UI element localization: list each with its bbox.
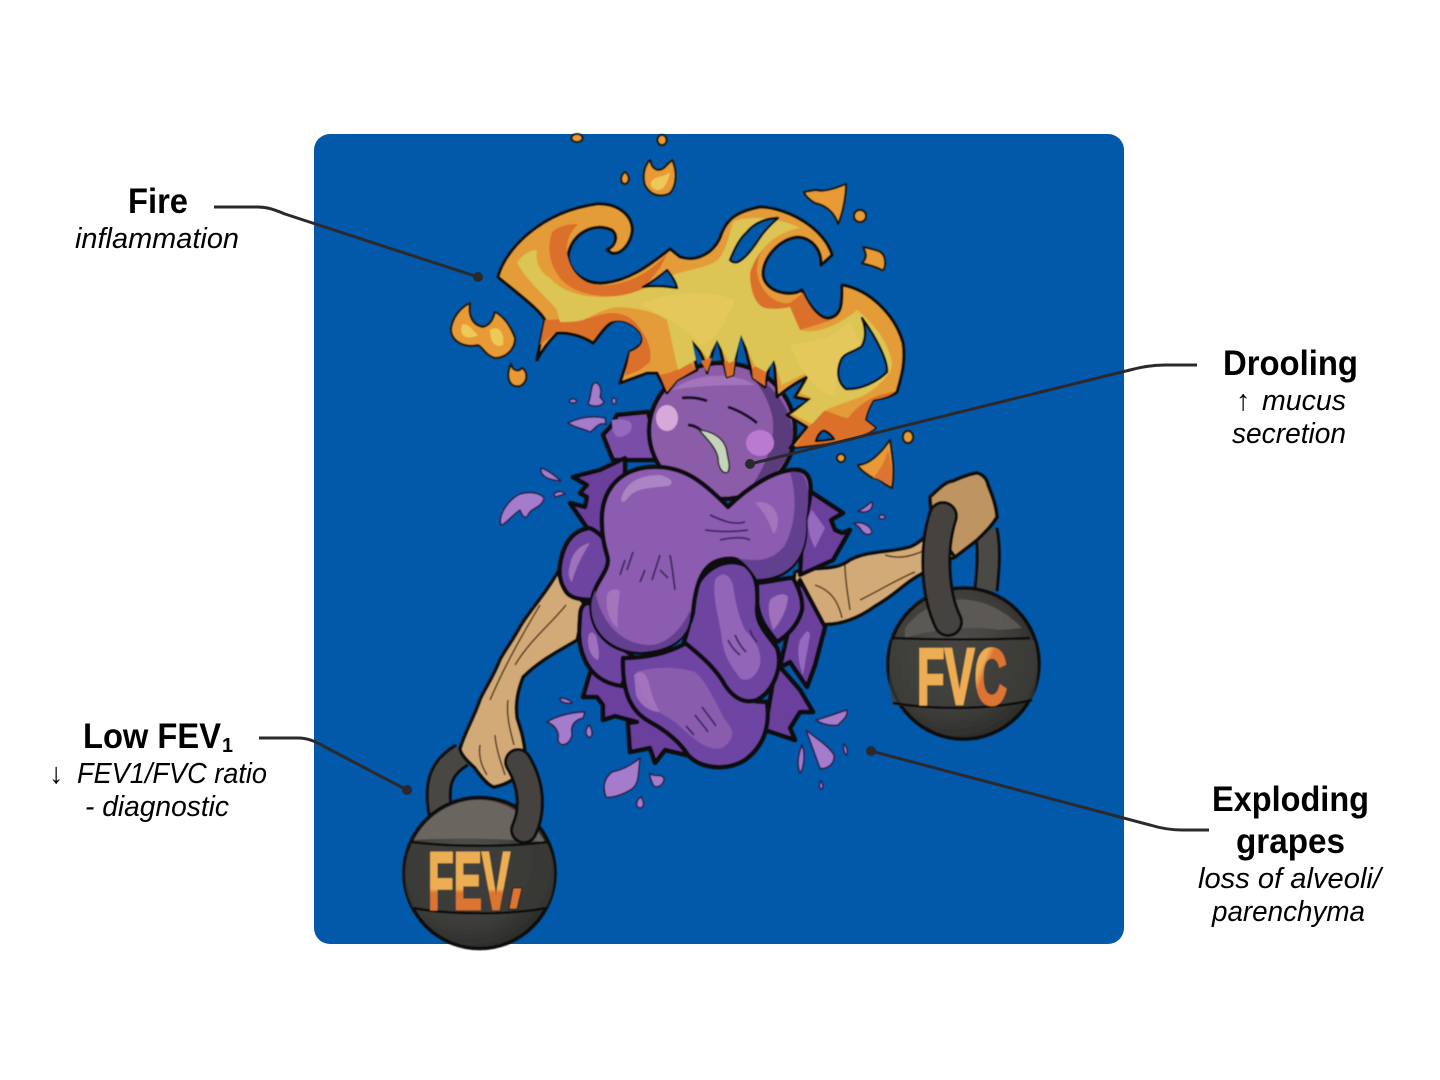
kettlebell: FVC [888, 473, 1039, 739]
grape head with face [649, 363, 795, 499]
flame openings [643, 218, 887, 441]
label: Drooling: Drooling [1223, 344, 1358, 383]
kettle label FVC: FVC [917, 632, 1007, 721]
kettle handle: FEV1 back [439, 755, 462, 816]
eye: right closed [728, 407, 757, 423]
flame core: yellow [517, 218, 892, 424]
label: Low FEV1: Low FEV [83, 717, 222, 756]
panel: blue illustration background [314, 134, 1124, 944]
drool [699, 430, 729, 473]
arm: left arm holding FEV1 kettlebell [460, 572, 585, 787]
label: Low FEV1: FEV1/FVC ratio [77, 758, 267, 790]
flames: main fire on head [498, 204, 904, 448]
label: Low FEV1 [49, 717, 267, 823]
label: Exploding grapes: grapes [1236, 822, 1345, 861]
label: Drooling: mucus [1262, 385, 1346, 417]
flame shading: red-orange bands [540, 224, 896, 447]
kettle handle: back [986, 530, 988, 590]
kettle label subscript [509, 888, 522, 909]
label: Exploding grapes: Exploding [1212, 780, 1369, 819]
label: Low FEV1: - diagnostic [85, 791, 229, 823]
grape wrinkles [620, 515, 750, 590]
arm: right arm holding FVC kettlebell [790, 526, 970, 624]
label: Fire: inflammation [75, 223, 239, 255]
eye: left closed [682, 398, 707, 401]
label: Drooling: secretion [1232, 418, 1346, 450]
label: Exploding grapes: parenchyma [1211, 896, 1365, 928]
label: Low FEV1: ↓ [49, 758, 64, 790]
label: Drooling: ↑ [1236, 385, 1250, 417]
grape: middle peanut [684, 562, 779, 701]
label: Low FEV1: 1 [222, 735, 233, 757]
leader line: Drooling [745, 365, 1197, 469]
right hand gripping handle [930, 473, 997, 557]
grape highlights [621, 475, 672, 502]
kettle handle: front [518, 762, 530, 830]
leader line: Fire [214, 207, 483, 282]
flame highlight [640, 293, 860, 395]
cheek: left blush [656, 405, 678, 431]
grape: left upper [560, 528, 612, 600]
grape: large top lobe joined to right [591, 467, 811, 653]
kettle label FEV1: FEV [428, 836, 510, 927]
kettlebell: FEV1 [404, 762, 555, 948]
leader line: Exploding grapes [866, 746, 1209, 830]
torn grape skin behind cluster [570, 412, 850, 763]
label: Exploding grapes [1198, 780, 1384, 928]
leader line: Low FEV1 [259, 738, 412, 795]
grape: left lower [579, 603, 632, 686]
label: Exploding grapes: loss of alveoli/ [1198, 863, 1384, 895]
mouth [688, 425, 704, 433]
label: Fire: Fire [128, 182, 188, 221]
flames: scattered sparks [451, 134, 913, 488]
grape: right middle [757, 578, 802, 642]
kettle handle: front [936, 516, 948, 622]
grape: bottom [623, 642, 768, 767]
illustration: grape character with fire and kettlebells [404, 134, 1039, 948]
grape cluster [560, 467, 811, 767]
label: Fire [75, 182, 239, 255]
splatter: purple juice droplets [500, 383, 885, 808]
cheek: right blush [746, 430, 774, 456]
label: Drooling [1223, 344, 1358, 450]
